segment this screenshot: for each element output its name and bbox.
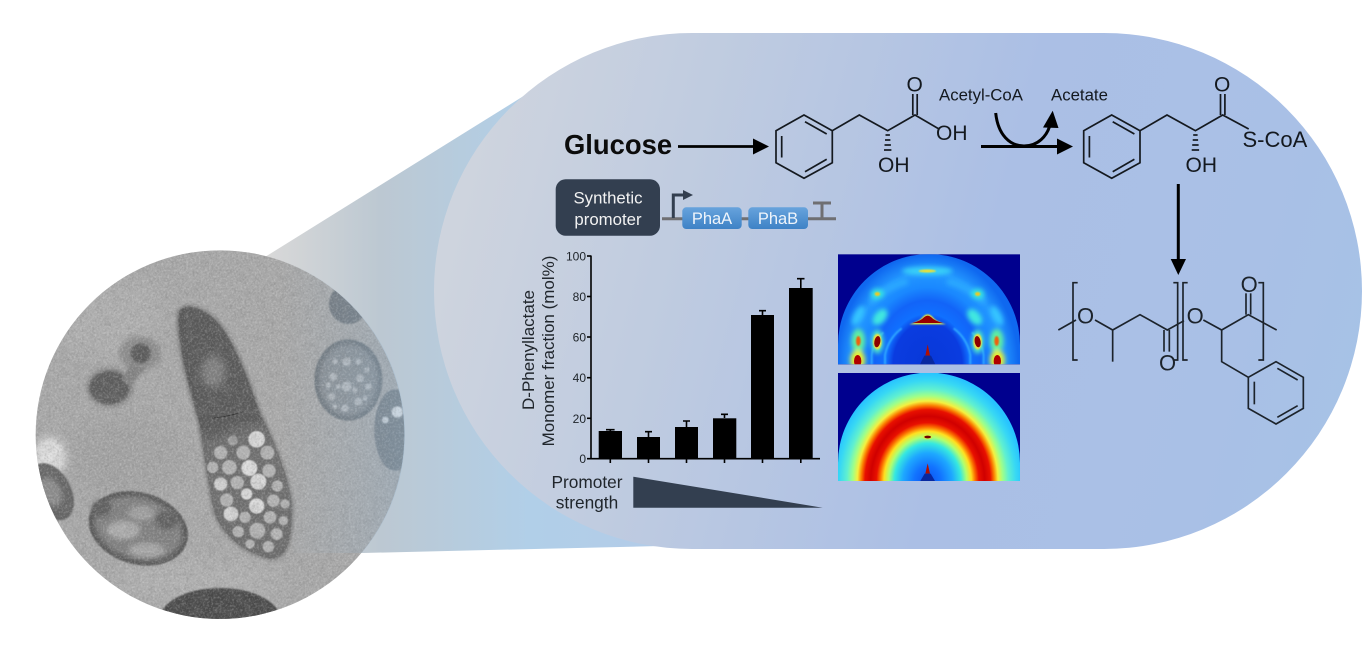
promoter strength label: strength <box>556 492 618 512</box>
synthetic promoter box: Synthetic <box>573 188 643 207</box>
molecule: copolymer: O <box>1159 350 1176 375</box>
label: Acetate: Acetate <box>1051 86 1108 104</box>
left edge cell <box>38 462 75 521</box>
elongated cell <box>178 307 297 563</box>
molecule: phenyllactyl-CoA: O <box>1214 74 1230 96</box>
molecule: copolymer: O <box>1187 303 1204 328</box>
gene PhaA <box>682 207 742 229</box>
molecule: D-phenyllactate: OH <box>878 154 910 177</box>
top-right cell <box>328 290 362 324</box>
gene PhaA: PhaA <box>692 210 732 228</box>
blue cone tint over micrograph <box>320 290 405 553</box>
molecule: phenyllactyl-CoA: S-CoA <box>1242 127 1308 152</box>
error bars <box>606 279 804 437</box>
lower-left vacuolated cell <box>88 490 189 566</box>
promoter strength label <box>551 472 623 512</box>
molecule: copolymer: O <box>1077 303 1094 328</box>
mottling and grain <box>37 290 396 618</box>
bars <box>599 288 813 459</box>
micrograph circle <box>36 250 405 619</box>
bright patch <box>34 437 66 476</box>
far-right cell <box>374 389 404 471</box>
zoom cone connecting micrograph to panel <box>220 92 700 553</box>
promoter strength label: Promoter <box>551 472 623 492</box>
y tick labels: 40 <box>573 371 586 385</box>
y tick labels: 100 <box>566 250 586 264</box>
panel: pathway pill <box>434 33 1362 549</box>
molecule: D-phenyllactate: OH <box>936 122 968 145</box>
X-ray pattern: amorphous <box>838 373 1020 481</box>
y axis title: Monomer fraction (mol%) <box>539 256 558 446</box>
terminator <box>813 203 831 218</box>
bar chart: monomer fraction <box>519 250 820 466</box>
y tick labels: 60 <box>573 330 586 344</box>
y axis title <box>519 256 558 446</box>
molecule: copolymer <box>1058 272 1303 424</box>
axes and ticks <box>587 256 820 463</box>
promoter strength wedge <box>633 477 823 508</box>
X-ray pattern: crystalline <box>838 254 1020 370</box>
label: Acetyl-CoA: Acetyl-CoA <box>939 86 1024 104</box>
right round cell <box>314 339 382 421</box>
arrow: glucose to phenyllactate <box>678 138 769 154</box>
arrow: CoA transfer reaction <box>981 111 1073 154</box>
molecule: phenyllactyl-CoA <box>1084 74 1308 178</box>
synthetic promoter box <box>556 179 660 236</box>
gene construct <box>662 190 836 229</box>
y tick labels: 0 <box>579 452 586 466</box>
y tick labels: 20 <box>573 412 586 426</box>
gene PhaB: PhaB <box>758 210 798 228</box>
molecule: D-phenyllactate <box>776 74 968 178</box>
arrow: to polymer <box>1171 184 1186 275</box>
y axis title: D-Phenyllactate <box>519 290 538 410</box>
promoter arrow <box>673 190 693 218</box>
gene PhaB <box>748 207 808 229</box>
molecule: phenyllactyl-CoA: OH <box>1186 154 1217 177</box>
y tick labels: 80 <box>573 290 586 304</box>
small dividing cell <box>86 336 161 407</box>
bottom cell <box>162 587 278 619</box>
synthetic promoter box: promoter <box>574 210 642 229</box>
molecule: copolymer: O <box>1241 272 1258 297</box>
y tick labels <box>566 250 586 466</box>
molecule: D-phenyllactate: O <box>906 74 923 96</box>
heading: Glucose: Glucose <box>564 129 672 160</box>
